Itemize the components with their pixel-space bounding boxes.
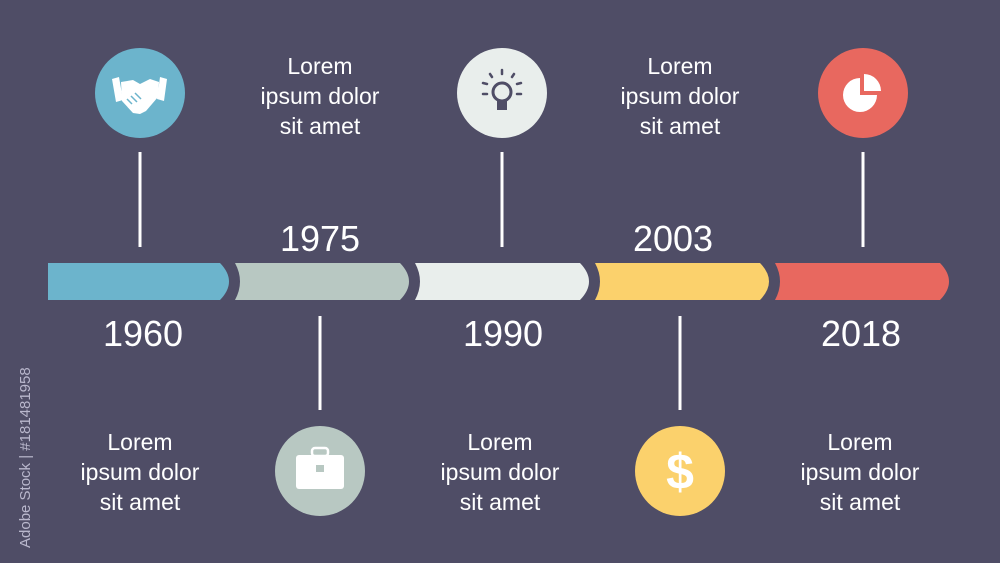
icon: handshake: [95, 48, 185, 138]
text bottom 1990: ipsum dolor: [441, 459, 560, 485]
text top 1975: Lorem: [287, 53, 353, 79]
text bottom 1990: sit amet: [460, 489, 541, 515]
text bottom 1960: sit amet: [100, 489, 181, 515]
text top 1975: ipsum dolor: [261, 83, 380, 109]
connector lines: [140, 152, 863, 410]
text top 2003: ipsum dolor: [621, 83, 740, 109]
text bottom 2018: [801, 429, 920, 515]
text top 2003: [621, 53, 740, 139]
text bottom 1960: [81, 429, 200, 515]
years: 1990: [463, 313, 543, 354]
years: 1960: [103, 313, 183, 354]
text bottom 2018: ipsum dolor: [801, 459, 920, 485]
icon: dollar: $: [666, 444, 694, 500]
text top 2003: sit amet: [640, 113, 721, 139]
text top 1975: [261, 53, 380, 139]
text bottom 1960: ipsum dolor: [81, 459, 200, 485]
years: 2003: [633, 218, 713, 259]
text top 1975: sit amet: [280, 113, 361, 139]
watermark id: Adobe Stock | #181481958: [17, 367, 34, 548]
years: 1975: [280, 218, 360, 259]
years: [103, 218, 901, 354]
timeline bar: [48, 263, 949, 300]
icon: briefcase: [275, 426, 365, 516]
icon: lightbulb: [457, 48, 547, 138]
text bottom 1960: Lorem: [107, 429, 173, 455]
text bottom 1990: Lorem: [467, 429, 533, 455]
text top 2003: Lorem: [647, 53, 713, 79]
text bottom 2018: Lorem: [827, 429, 893, 455]
text bottom 2018: sit amet: [820, 489, 901, 515]
text bottom 1990: [441, 429, 560, 515]
years: 2018: [821, 313, 901, 354]
icon: dollar: [635, 426, 725, 516]
icon: pie chart: [818, 48, 908, 138]
